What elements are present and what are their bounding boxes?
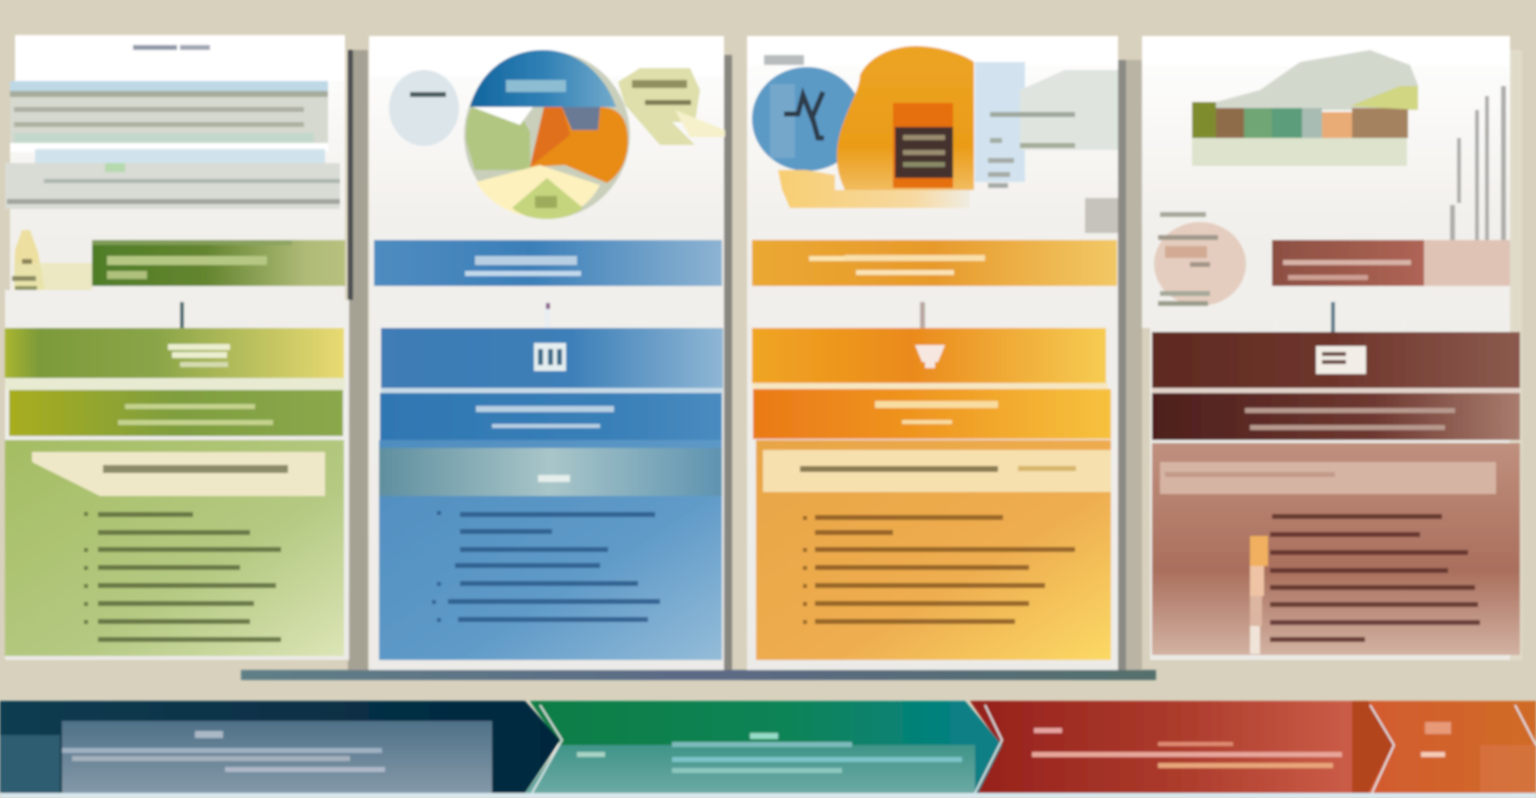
body (756, 440, 1111, 660)
subheader (753, 389, 1111, 439)
body (5, 440, 344, 656)
body (379, 440, 722, 660)
arrow outlines (532, 705, 1536, 793)
text block lower (5, 163, 340, 209)
chart: pie (464, 50, 630, 219)
title band (752, 240, 1117, 286)
connector (545, 302, 550, 330)
heading (133, 45, 210, 50)
connector (920, 302, 925, 330)
icon: blue circle (752, 55, 862, 171)
header bar with icon (381, 328, 723, 388)
sidebar swatches (1250, 536, 1268, 654)
title band (1272, 240, 1510, 286)
icon bubble right (618, 68, 725, 145)
panel shadows (348, 50, 1522, 670)
connector (180, 302, 184, 330)
arrow: red (965, 701, 1393, 793)
title band (92, 240, 345, 286)
header bar with icon (5, 328, 344, 378)
band: process arrows (0, 701, 1536, 798)
bullet list (432, 511, 660, 622)
icon: bottle (12, 230, 92, 290)
subheader (380, 393, 722, 440)
landscape illustration (1192, 50, 1418, 166)
panel: orange column (747, 36, 1118, 670)
bubble (1154, 212, 1246, 306)
callout (763, 450, 1111, 492)
arrow: green (525, 701, 1002, 793)
callout (1160, 462, 1496, 494)
panel side text (975, 62, 1118, 188)
bullet list (803, 515, 1075, 624)
baseline bar under panels (241, 670, 1156, 680)
callout (32, 452, 325, 496)
panel: blue column (369, 36, 725, 670)
subheader (1152, 393, 1520, 440)
header bar with icon (752, 328, 1106, 383)
text block (10, 81, 328, 163)
callout (379, 448, 722, 496)
panel: brown column (1142, 36, 1520, 660)
bullet list (84, 512, 281, 642)
icon bubble left (389, 70, 459, 146)
vertical text lines (1450, 86, 1506, 281)
arrow: orange tail (1360, 701, 1536, 793)
body (1152, 443, 1520, 655)
panel: green column (5, 35, 349, 660)
bottom highlight (0, 793, 1536, 798)
arrow: navy (0, 701, 560, 793)
header bar with icon (1152, 332, 1520, 388)
subheader (9, 390, 343, 436)
building icon (893, 103, 953, 188)
connector (1331, 302, 1335, 332)
bullet list (1270, 514, 1480, 642)
icon: orange shape (778, 46, 974, 208)
title band (374, 240, 722, 286)
